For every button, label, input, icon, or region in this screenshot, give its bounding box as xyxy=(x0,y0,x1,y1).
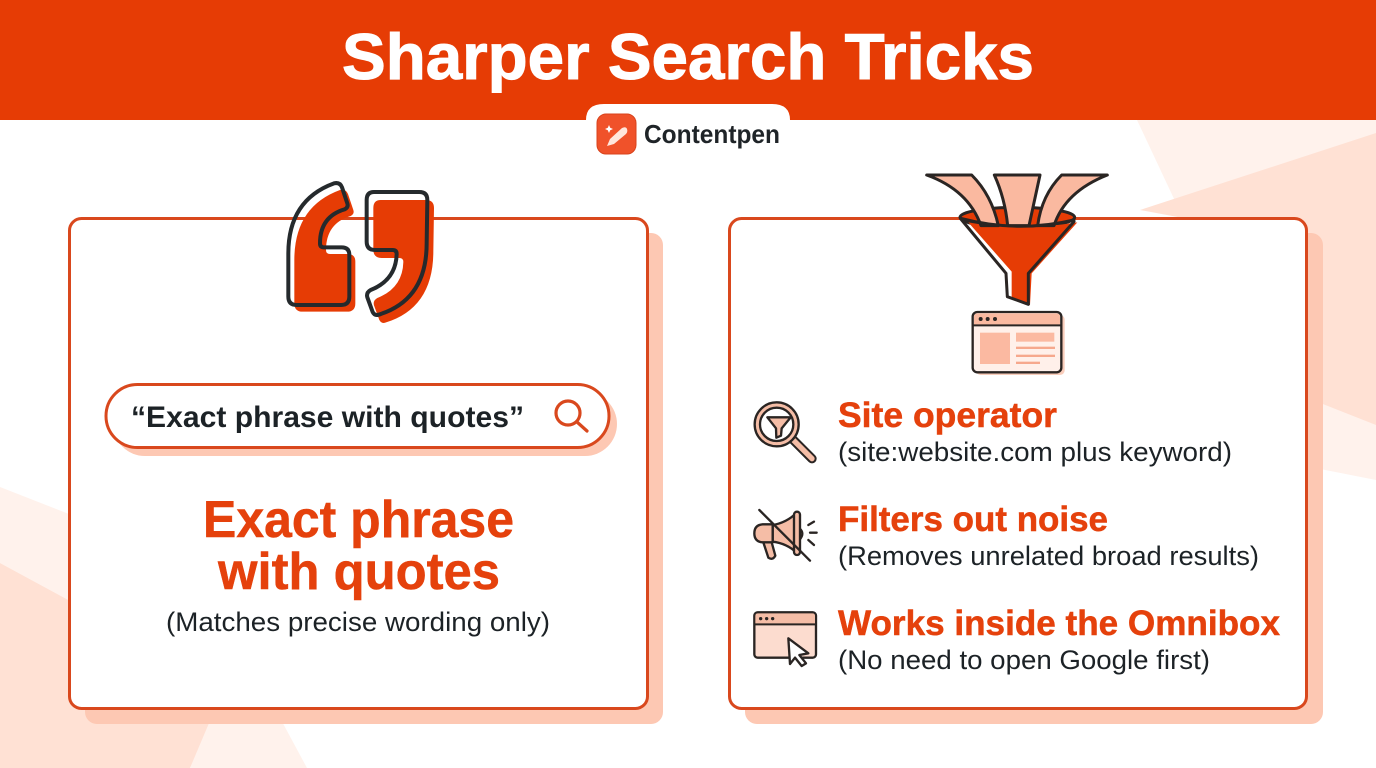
item: works inside the omnibox: Works inside the Omnibox xyxy=(838,604,1281,643)
item: filters out noise xyxy=(754,500,1259,571)
item: site operator xyxy=(755,396,1232,467)
icon: browser window result xyxy=(973,312,1065,375)
heading: exact phrase xyxy=(203,491,514,601)
item: site operator: Site operator xyxy=(838,396,1057,435)
icon: funnel xyxy=(927,175,1107,375)
icon: magnifier with filter xyxy=(755,402,812,459)
panel: site operator xyxy=(730,175,1323,724)
icon: browser with cursor xyxy=(754,612,816,666)
panel: exact phrase xyxy=(70,183,663,724)
search bar: “Exact phrase with quotes” xyxy=(131,401,524,434)
item: filters out noise: Filters out noise xyxy=(838,500,1108,539)
logo: Contentpen: Contentpen xyxy=(644,119,780,149)
icon: search xyxy=(556,401,587,431)
logo: Contentpen xyxy=(586,104,790,154)
header banner xyxy=(0,0,1376,120)
icon: muted megaphone xyxy=(754,510,817,561)
item: works inside the omnibox: (No need to open Google first) xyxy=(838,645,1210,675)
search bar xyxy=(106,384,617,456)
item: site operator: (site:website.com plus keyword) xyxy=(838,437,1232,467)
icon: quotation marks xyxy=(288,183,434,323)
title: Sharper Search Tricks xyxy=(342,20,1034,93)
item: works inside the omnibox xyxy=(754,604,1281,675)
description: exact phrase: (Matches precise wording only) xyxy=(166,607,550,637)
heading: exact phrase: with quotes xyxy=(217,543,500,601)
item: filters out noise: (Removes unrelated broad results) xyxy=(838,541,1259,571)
heading: exact phrase: Exact phrase xyxy=(203,491,514,549)
